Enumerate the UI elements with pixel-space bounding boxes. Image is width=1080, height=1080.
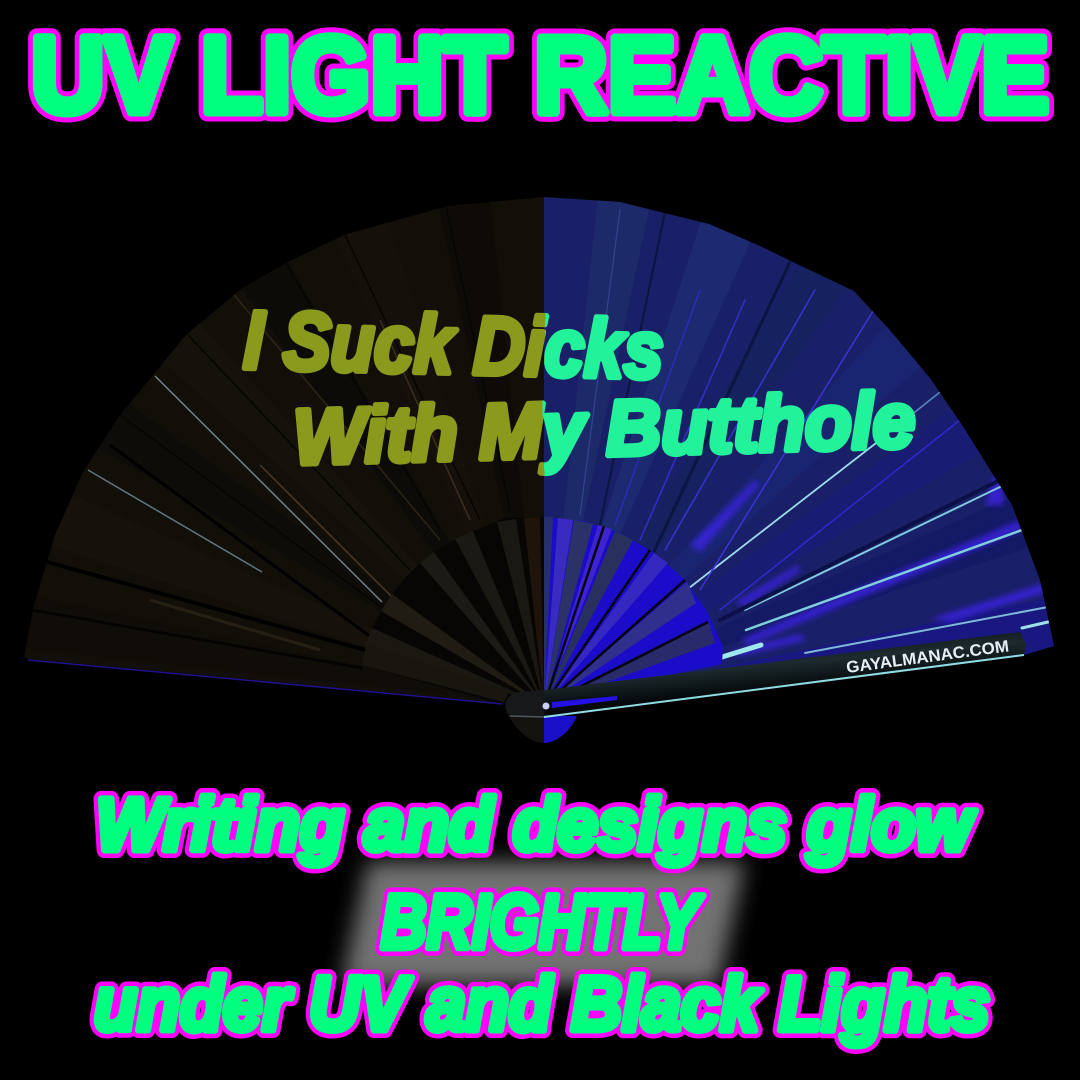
slogan line 1: I Suck Dicks	[243, 295, 665, 396]
hand fan	[24, 197, 1054, 743]
fan purple lower edge	[28, 660, 503, 704]
caption line 1: Writing and designs glow	[96, 783, 976, 866]
inner ribs, unlit left half	[362, 517, 544, 705]
caption line 3: under UV and Black Lights	[94, 962, 990, 1047]
hub and pin	[505, 690, 550, 717]
panel: fabric, unlit left half	[24, 197, 1054, 702]
caption line 2: BRIGHTLY	[381, 880, 704, 965]
inner ribs, UV-lit right half	[544, 517, 723, 705]
caption line 1: Writing and designs glow	[96, 783, 976, 866]
caption text	[94, 783, 990, 1047]
caption line 3: under UV and Black Lights	[94, 962, 990, 1047]
fan tip below hub	[506, 712, 577, 743]
title: UV LIGHT REACTIVE	[31, 14, 1049, 135]
purple reflections	[690, 460, 1047, 656]
brand text: GAYALMANAC.COM	[845, 637, 1010, 677]
caption line 2: BRIGHTLY	[381, 880, 704, 965]
panel: fabric, UV-lit right half	[544, 197, 1054, 674]
slogan line 2: With My Butthole	[292, 376, 916, 481]
handle stick with brand text	[544, 632, 1026, 717]
title: UV LIGHT REACTIVE	[31, 14, 1049, 135]
grey glow behind BRIGHTLY	[342, 862, 745, 985]
fan slogan	[243, 295, 916, 481]
